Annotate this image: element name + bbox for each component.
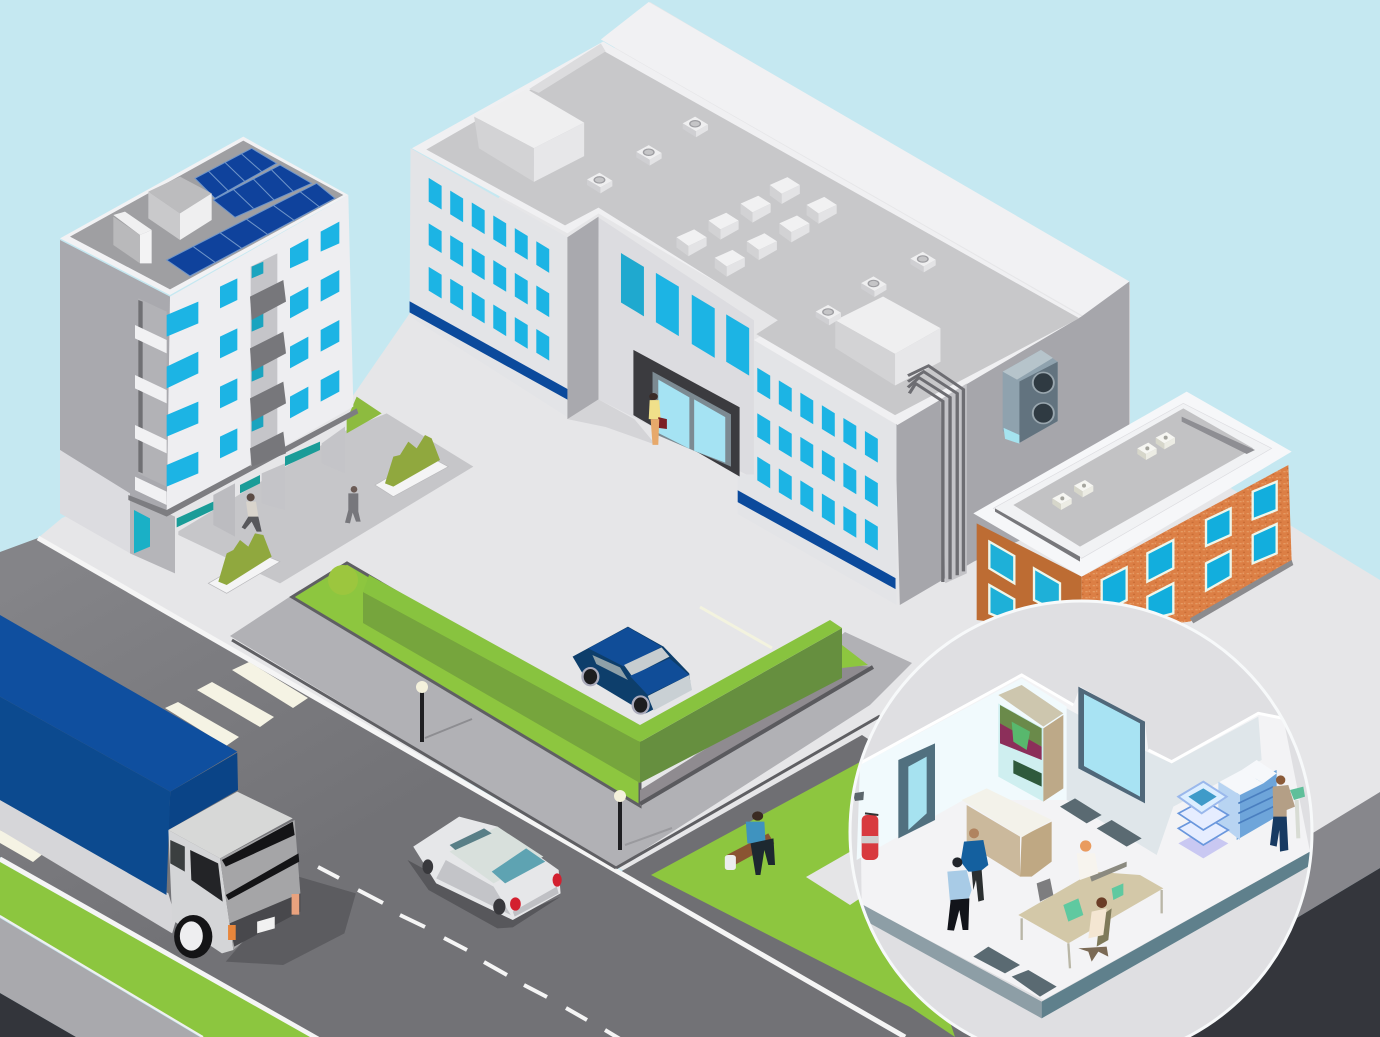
lamp post two — [614, 790, 672, 850]
left wall windows — [989, 542, 1060, 623]
entrance door — [633, 350, 740, 476]
fire extinguisher — [862, 813, 878, 860]
blue car — [573, 627, 692, 714]
left wall — [60, 240, 170, 513]
counter — [962, 788, 1052, 877]
paving patch — [806, 850, 880, 905]
front wall — [1082, 465, 1292, 633]
seated man with chair — [1078, 897, 1112, 962]
sidewalk around hedge — [230, 590, 912, 868]
left wall — [977, 523, 1082, 633]
pedestrian on pavement — [345, 486, 361, 523]
base — [1190, 560, 1293, 623]
planter front — [208, 533, 280, 593]
chassis — [0, 800, 176, 933]
woman at door — [649, 393, 667, 445]
man at kiosk — [1270, 775, 1305, 852]
roof box A — [474, 89, 584, 182]
roof box small — [113, 212, 152, 263]
floor base edges — [863, 852, 1310, 1018]
interior detail circle — [851, 602, 1311, 1037]
small lawn patch — [347, 397, 382, 433]
pavement under building — [175, 413, 473, 583]
truck — [0, 615, 356, 965]
lower green verge — [0, 862, 310, 1037]
grass lawn — [651, 762, 955, 1037]
lamp post one — [416, 681, 472, 742]
wall cap white — [860, 675, 1073, 763]
center windows — [621, 253, 749, 376]
entrance ground shadow — [567, 399, 656, 445]
floor vents — [973, 798, 1142, 997]
large window — [1078, 687, 1145, 803]
left wing wall — [410, 148, 567, 417]
right wing windows — [757, 368, 878, 550]
truck lights — [228, 925, 236, 940]
lane dashes — [318, 867, 620, 1037]
balcony column — [250, 253, 286, 467]
data tray stack — [1178, 782, 1228, 858]
right wing wall — [738, 340, 896, 605]
roof box B — [835, 297, 940, 386]
road — [0, 538, 1000, 1037]
cab — [168, 792, 293, 858]
circle outline — [850, 601, 1312, 1037]
riser pipes — [908, 366, 967, 583]
server stack blue — [1218, 760, 1277, 840]
roof vents round — [587, 117, 936, 325]
crosswalk — [0, 662, 308, 862]
right dark wall — [895, 282, 1129, 605]
shelf — [998, 685, 1063, 802]
roof box large — [148, 177, 212, 240]
canopy — [128, 408, 358, 517]
man in light blue shirt — [947, 857, 972, 931]
left apartment building — [60, 137, 473, 593]
rooftop units — [1052, 432, 1175, 510]
roof — [973, 392, 1292, 577]
roof — [60, 137, 348, 295]
back parapet — [601, 2, 1129, 316]
solar panels — [167, 148, 335, 276]
planter back — [375, 435, 448, 497]
round bush — [328, 565, 358, 595]
door — [898, 743, 935, 838]
side windows — [167, 302, 198, 487]
balcony stack left — [135, 298, 167, 505]
left wing windows — [429, 178, 549, 361]
ground floor — [130, 427, 345, 575]
front wall — [167, 195, 353, 513]
seated woman at desk — [1080, 840, 1098, 880]
desk — [1018, 862, 1163, 968]
condenser unit — [1003, 350, 1058, 444]
center wall — [598, 217, 754, 478]
front windows — [220, 222, 339, 458]
white car — [408, 817, 562, 928]
man in blue suit — [961, 828, 988, 902]
roof back strip — [529, 43, 606, 93]
back left wall — [856, 770, 862, 860]
security camera — [854, 792, 864, 801]
wheel — [174, 915, 212, 958]
roof — [412, 42, 1082, 425]
right ground edge — [1150, 792, 1380, 1037]
truck shadow — [226, 877, 356, 965]
man on bench — [725, 811, 775, 875]
hedge — [292, 563, 873, 806]
front wall windows — [1102, 482, 1277, 620]
trailer — [0, 615, 237, 792]
pedestrian at building — [242, 493, 262, 532]
brick building — [973, 392, 1293, 633]
roof units grid — [676, 177, 837, 277]
right wing stripe — [738, 490, 896, 589]
back right wall — [1067, 708, 1262, 855]
center return wall — [567, 217, 598, 419]
parking line — [700, 607, 772, 648]
main building — [410, 2, 1129, 605]
left wing stripe — [410, 301, 568, 400]
room floor and walls — [860, 675, 1310, 1000]
